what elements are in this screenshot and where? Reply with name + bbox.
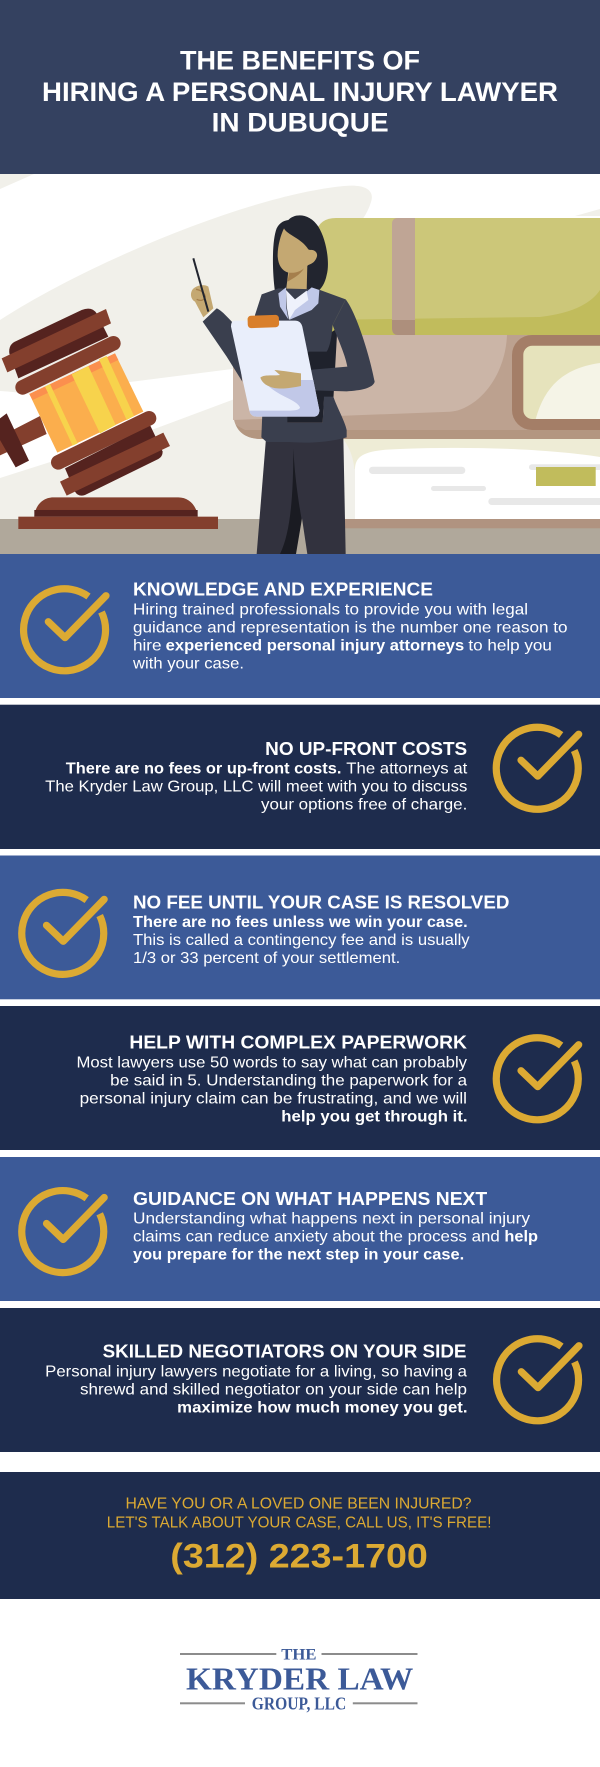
- blouse collar: [278, 287, 319, 320]
- trousers: [257, 437, 346, 554]
- panel: skilled negotiators on your side: maximize how much money you get.: [177, 1399, 467, 1416]
- gavel: [0, 309, 218, 529]
- panel: no up-front costs: The Kryder Law Group, LLC will meet with you to discuss: [45, 778, 467, 795]
- panel: knowledge and experience: with your case.: [132, 655, 244, 672]
- header panel with title: [0, 0, 600, 174]
- icon: check circle: [496, 1038, 579, 1120]
- panel: skilled negotiators on your side: [0, 1308, 600, 1452]
- panel: help with complex paperwork: HELP WITH COMPLEX PAPERWORK: [129, 1033, 467, 1053]
- neck and face: [278, 228, 317, 300]
- lawyer figure: [191, 215, 375, 554]
- icon: check circle: [22, 892, 104, 974]
- panel: knowledge and experience: KNOWLEDGE AND EXPERIENCE: [133, 580, 433, 600]
- illustration panel: lawyer, gavel and books: [0, 174, 600, 554]
- raised arm, hand and pen: [191, 258, 242, 382]
- panel: guidance on what happens next: you prepare for the next step in your case.: [133, 1246, 464, 1263]
- panel: skilled negotiators on your side: shrewd and skilled negotiator on your side can help: [80, 1381, 467, 1398]
- panel: knowledge and experience: Hiring trained professionals to provide you with legal: [133, 601, 528, 618]
- panel: skilled negotiators on your side: Personal injury lawyers negotiate for a living, so having a: [45, 1363, 467, 1380]
- header panel with title: IN DUBUQUE: [212, 108, 389, 138]
- panel: call to action: LET'S TALK ABOUT YOUR CASE, CALL US, IT'S FREE!: [107, 1514, 491, 1531]
- panel: no up-front costs: NO UP-FRONT COSTS: [265, 739, 467, 759]
- panel: help with complex paperwork: be said in 5. Understanding the paperwork for a: [110, 1072, 467, 1089]
- panel: call to action: HAVE YOU OR A LOVED ONE BEEN INJURED?: [126, 1495, 472, 1512]
- icon: check circle: [496, 727, 579, 809]
- panel: help with complex paperwork: Most lawyers use 50 words to say what can probably: [76, 1054, 467, 1071]
- panel: guidance on what happens next: Understanding what happens next in personal injury: [133, 1210, 530, 1228]
- panel: guidance on what happens next: help: [504, 1228, 538, 1245]
- panel: knowledge and experience: experienced personal injury attorneys: [166, 637, 464, 654]
- panel: no fee until your case is resolved: 1/3 or 33 percent of your settlement.: [133, 950, 400, 967]
- header panel with title: HIRING A PERSONAL INJURY LAWYER: [42, 77, 558, 107]
- panel: skilled negotiators on your side: SKILLED NEGOTIATORS ON YOUR SIDE: [103, 1342, 466, 1362]
- panel: call to action: [0, 1472, 600, 1599]
- panel: guidance on what happens next: claims can reduce anxiety about the process and: [133, 1228, 500, 1245]
- panel: no fee until your case is resolved: This is called a contingency fee and is usually: [133, 932, 470, 949]
- panel: no fee until your case is resolved: NO FEE UNTIL YOUR CASE IS RESOLVED: [133, 893, 509, 913]
- panel: help with complex paperwork: help you get through it.: [281, 1108, 468, 1125]
- logo: The Kryder Law Group, LLC: GROUP, LLC: [252, 1693, 346, 1713]
- header panel with title: THE BENEFITS OF: [180, 46, 420, 76]
- panel: no fee until your case is resolved: There are no fees unless we win your case.: [133, 914, 468, 931]
- panel: knowledge and experience: to help you: [468, 637, 552, 654]
- panel: no up-front costs: [0, 705, 600, 849]
- panel: help with complex paperwork: [0, 1006, 600, 1150]
- panel: guidance on what happens next: GUIDANCE ON WHAT HAPPENS NEXT: [133, 1189, 487, 1209]
- panel: guidance on what happens next: [0, 1157, 600, 1301]
- suit jacket: [255, 288, 375, 443]
- logo: The Kryder Law Group, LLC: [180, 1647, 418, 1713]
- panel: no up-front costs: your options free of charge.: [261, 796, 467, 813]
- panel: no fee until your case is resolved: [0, 856, 600, 999]
- panel: call to action: (312) 223-1700: [170, 1537, 428, 1575]
- logo: The Kryder Law Group, LLC: KRYDER LAW: [186, 1660, 413, 1696]
- icon: check circle: [497, 1339, 579, 1421]
- panel: no up-front costs: There are no fees or up-front costs.: [66, 760, 341, 777]
- logo: The Kryder Law Group, LLC: THE: [281, 1647, 316, 1664]
- panel: knowledge and experience: hire: [133, 637, 162, 654]
- panel: knowledge and experience: [0, 554, 600, 698]
- panel: knowledge and experience: guidance and representation is the number one reason to: [133, 619, 568, 636]
- panel: no up-front costs: The attorneys at: [346, 760, 468, 777]
- icon: check circle: [22, 1191, 104, 1273]
- panel: help with complex paperwork: personal injury claim can be frustrating, and we will: [80, 1090, 467, 1107]
- clipboard: [231, 315, 319, 417]
- hair: [273, 215, 328, 293]
- books: [233, 218, 600, 528]
- hand on clipboard: [260, 370, 301, 389]
- icon: check circle: [24, 589, 106, 671]
